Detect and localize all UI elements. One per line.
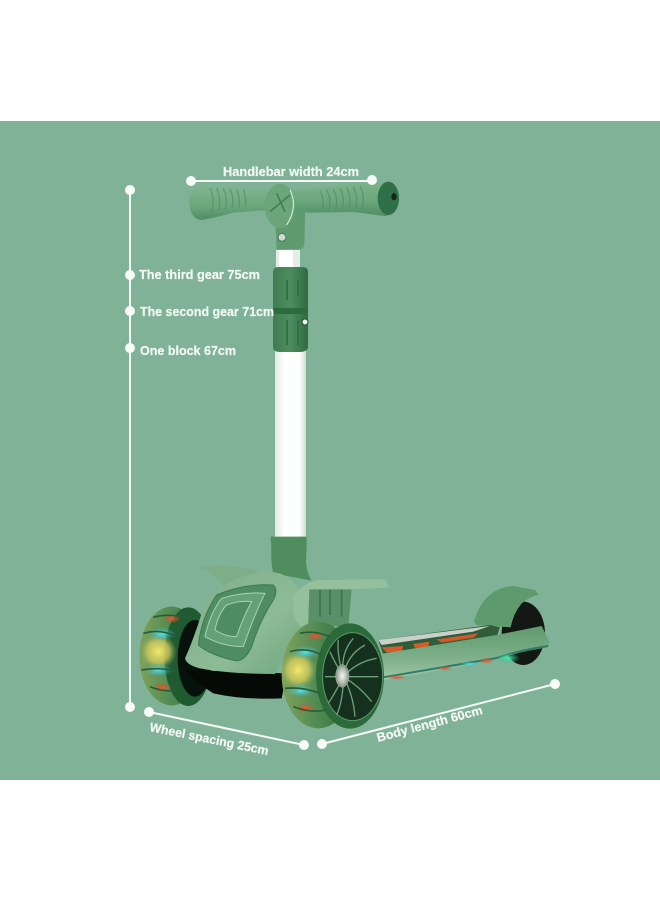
dimension: body length: Body length 60cm [375, 703, 484, 745]
rear fender, wheel and deck [378, 586, 549, 680]
green background panel [0, 121, 660, 780]
dimension: overall height line [125, 185, 135, 712]
dimension: handlebar width: Handlebar width 24cm [223, 165, 359, 179]
handlebar [189, 181, 399, 249]
dimension: handlebar width [186, 165, 377, 186]
telescopic stem [273, 250, 308, 537]
scooter illustration [139, 181, 549, 729]
left footrest wing [198, 566, 258, 587]
label: second gear: The second gear 71cm [140, 305, 274, 319]
dimension: wheel spacing: Wheel spacing 25cm [148, 720, 270, 758]
label: third gear: The third gear 75cm [139, 268, 260, 282]
left rear wheel [139, 607, 212, 706]
right front wheel [280, 622, 384, 729]
dimension: wheel spacing [144, 707, 309, 758]
dimension: body length [317, 679, 560, 749]
base and steering dome [185, 537, 389, 699]
label: one block: One block 67cm [140, 344, 236, 358]
